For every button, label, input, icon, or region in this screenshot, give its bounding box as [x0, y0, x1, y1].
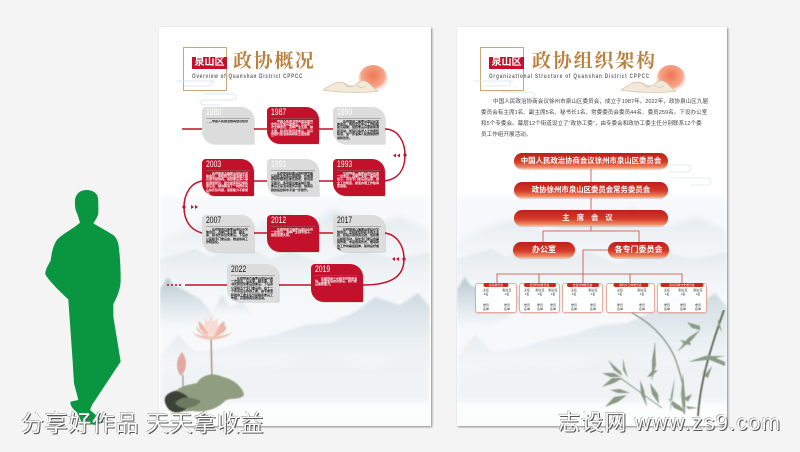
committee box 5: 委员 — [680, 303, 686, 307]
committee box 3: 1名 — [572, 292, 576, 296]
org bar: office — [513, 242, 575, 258]
committee box 1: 名单 — [504, 307, 510, 311]
committee box 5 — [657, 283, 707, 313]
card: 1980 — [202, 107, 254, 144]
committee box 5: 1名 — [665, 292, 669, 296]
committee box 1 — [475, 283, 517, 313]
committee box 4: 主任 — [617, 288, 623, 292]
org bar: chair meeting — [514, 210, 668, 226]
committee box 5: 1名 — [681, 292, 685, 296]
panel: organisation poster — [457, 27, 727, 426]
illustration: bamboo — [602, 310, 726, 417]
org bar: standing committee — [514, 182, 668, 198]
box heading — [613, 283, 648, 287]
card: 1991: 1991 — [271, 159, 286, 170]
committee box 2 — [519, 283, 560, 313]
committee box 4: 2名 — [640, 292, 644, 296]
card: 1980: 1980 — [206, 107, 221, 118]
org bar: CPPCC committee: 中国人民政治协商会议徐州市泉山区委员会 — [521, 156, 661, 165]
watermark: slogan: 分享好作品 天天拿收益 — [21, 410, 264, 436]
committee box 3 — [562, 283, 603, 313]
org bar: office: 办公室 — [532, 245, 556, 254]
district tag: 泉山区 — [194, 57, 224, 68]
cloud lines: overview — [176, 80, 237, 106]
committee box 2: 副主任 — [535, 288, 544, 292]
card: 2017: 2017 — [337, 215, 352, 226]
org bar: CPPCC committee — [514, 153, 668, 169]
district tag: 泉山区 — [492, 57, 522, 68]
committee box 4: 名单 — [617, 307, 623, 311]
committee box 2: 2名 — [551, 292, 555, 296]
committee box 4: 委员 — [617, 303, 623, 307]
intro paragraph: 中国人民政治协商会议徐州市泉山区委员会，成立于1987年。2022年，政协泉山区九届 — [493, 98, 708, 104]
box heading — [524, 283, 556, 287]
committee box 1: 2名 — [505, 292, 509, 296]
box heading — [660, 283, 704, 287]
box heading — [566, 283, 598, 287]
card: 2019: 2019 — [315, 264, 330, 275]
committee box 5: 名单 — [680, 307, 686, 311]
subtitle: organisation: Organizational Structure of Quanshan District CPPCC — [489, 73, 650, 80]
committee box 3: 委员 — [590, 303, 596, 307]
committee box 5: 委员 — [695, 303, 701, 307]
cloud lines: organisation — [474, 80, 535, 98]
committee box 2: 委员 — [537, 303, 543, 307]
header frame: organisation — [480, 47, 524, 91]
card: 2007 — [202, 215, 254, 252]
watermark: site: 志设网 www.zs9.com — [558, 410, 781, 435]
committee box 5: 副主任 — [693, 288, 702, 292]
committee box 1: 主任 — [483, 288, 489, 292]
card: 1993: 1993 — [337, 159, 352, 170]
landscape backgrounds — [160, 203, 727, 402]
committee box 4 — [606, 283, 655, 313]
org bar: special committees — [608, 242, 669, 258]
committee box 4: 名单 — [639, 307, 645, 311]
committee box 1: 副主任 — [502, 288, 512, 292]
card: 1993 — [333, 159, 385, 196]
committee box 5: 委员 — [664, 303, 670, 307]
card: 1987: 1987 — [271, 107, 286, 118]
box heading: 提案委员会 — [489, 283, 503, 287]
committee box 1: 2名 — [484, 292, 488, 296]
committee box 3: 2名 — [591, 292, 595, 296]
committee box 3: 名单 — [590, 307, 596, 311]
box heading: 社会法制委员会 — [573, 283, 592, 287]
card: 2012: 2012 — [271, 215, 286, 226]
committee box 2: 委员 — [524, 303, 530, 307]
panel: overview poster — [159, 27, 431, 426]
illustration: lotus — [164, 316, 244, 413]
intro paragraph: 员工作组开展活动。 — [481, 132, 531, 138]
box heading — [484, 283, 508, 287]
subtitle: overview: Overview of Quanshan District CPPCC — [192, 73, 303, 80]
committee box 1: 名单 — [483, 307, 489, 311]
committee box 4: 委员 — [639, 303, 645, 307]
title: overview: 政协概况 — [233, 51, 315, 72]
committee box 2: 1名 — [525, 292, 529, 296]
icon: sun and hills — [620, 65, 686, 93]
org bar: chair meeting: 主席会议 — [562, 213, 620, 222]
icon: sun and hills — [322, 65, 388, 93]
org bar: standing committee: 政协徐州市泉山区委员会常务委员会 — [532, 185, 650, 194]
intro paragraph: 委员会有主席1名、副主席5名、秘书长1名、常委委员会委员44名、委员259名。下设办公室 — [481, 110, 707, 116]
card: 2019 — [311, 264, 363, 302]
committee box 3: 副主任 — [588, 288, 598, 292]
committee box 2: 副主任 — [548, 288, 558, 292]
committee box 3: 名单 — [571, 307, 577, 311]
box heading: 教科文卫体委员会 — [619, 283, 642, 287]
committee box 2: 委员 — [550, 303, 556, 307]
card: 1991 — [267, 159, 319, 196]
card: 2017 — [333, 215, 385, 252]
card: 2007: 2007 — [206, 215, 221, 226]
committee box 5: 副主任 — [678, 288, 688, 292]
intro paragraph — [481, 98, 708, 138]
committee box 4: 副主任 — [637, 288, 646, 292]
committee box 5: 名单 — [695, 307, 701, 311]
card: 2003 — [202, 159, 254, 196]
committee box 1: 委员 — [504, 303, 510, 307]
committee box 2: 名单 — [524, 307, 530, 311]
box heading: 经济科技委员会 — [530, 283, 549, 287]
committee box 2: 主任 — [524, 288, 530, 292]
title: organisation: 政协组织架构 — [532, 51, 657, 72]
committee box 4: 1名 — [618, 292, 622, 296]
card: 2022: 2022 — [231, 264, 246, 275]
committee box 5: 主任 — [664, 288, 670, 292]
header frame: overview — [183, 47, 227, 91]
icon: human silhouette scale figure — [45, 190, 121, 425]
box heading: 民族宗教文史委员会 — [669, 283, 695, 287]
committee box 2: 名单 — [550, 307, 556, 311]
intro paragraph: 和5个专委会。幕层12个街道设立了“政协工委”，由专委会和政协工委主任分别联系12个委 — [481, 121, 702, 127]
committee box 3: 主任 — [571, 288, 577, 292]
card: 2012 — [267, 215, 319, 252]
committee box 2: 2名 — [538, 292, 542, 296]
card: 2003: 2003 — [206, 159, 221, 170]
committee box 1: 委员 — [483, 303, 489, 307]
committee box 2: 名单 — [537, 307, 543, 311]
card: 1987 — [267, 107, 319, 144]
card: 1990: 1990 — [337, 107, 352, 118]
card: 2022 — [227, 264, 279, 302]
committee box 3: 委员 — [571, 303, 577, 307]
committee box 5: 1名 — [696, 292, 700, 296]
card: 1990 — [333, 107, 385, 144]
committee box 5: 名单 — [664, 307, 670, 311]
org bar: special committees: 各专门委员会 — [614, 245, 662, 254]
